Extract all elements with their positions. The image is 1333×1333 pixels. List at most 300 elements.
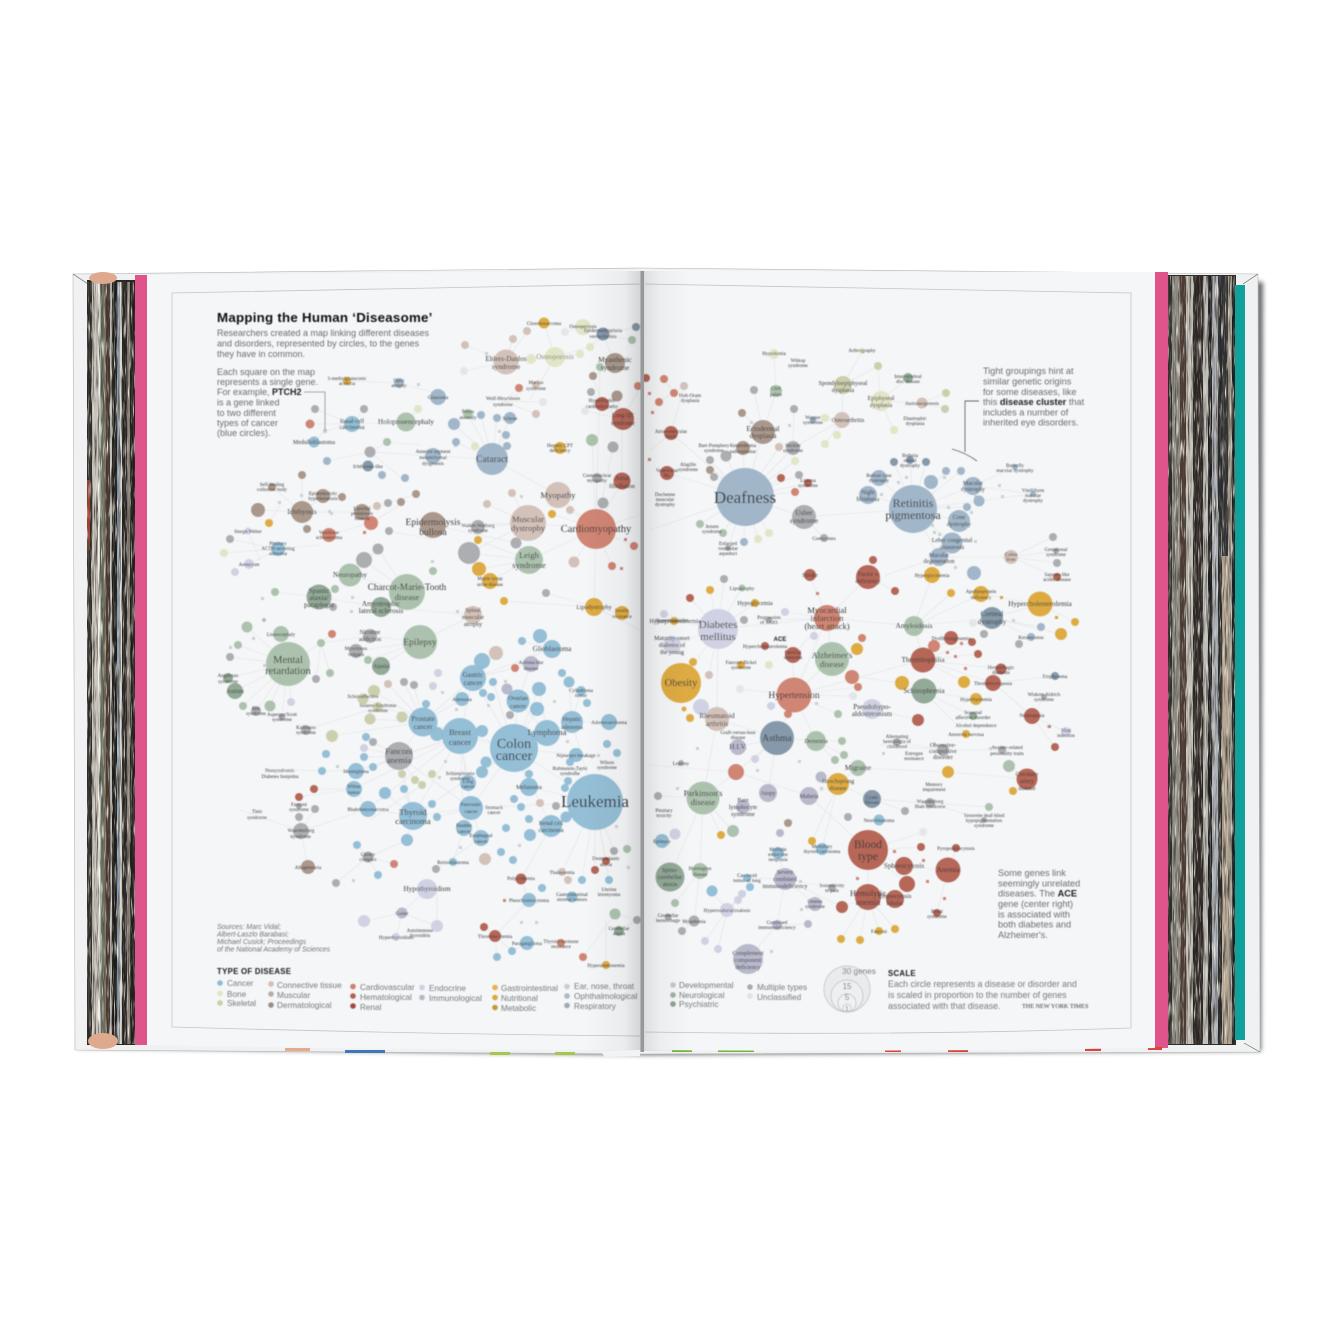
cardio-metabolic labels: disease [1018, 786, 1036, 792]
cancer cluster labels: Rhabdomyosarcoma [347, 808, 389, 813]
colon cancer node [490, 724, 538, 772]
cardio-metabolic labels: Alternating [886, 735, 909, 740]
cardio-metabolic labels: combined [773, 877, 797, 883]
cancer cluster labels: stromal tumors [557, 898, 587, 903]
cardio-metabolic labels: Hemorrhagic [988, 666, 1015, 671]
cardio-metabolic labels: affective disorder [955, 716, 991, 721]
cancer cluster labels: cancer [461, 785, 475, 790]
deafness cluster labels: Coenzymes [812, 537, 836, 542]
asthma node [760, 721, 794, 755]
legend: type of disease: Nutritional [501, 994, 538, 1003]
PTCH2 explanation text: to two different [217, 408, 276, 418]
cancer cluster labels: syndrome [291, 835, 312, 840]
cardio-metabolic labels: Thrombophilia [901, 656, 945, 664]
sources: Michael Cusick; Proceedings [217, 939, 307, 946]
heading cluster labels: Sturge-Weber [234, 530, 262, 535]
cancer cluster labels: Leukemia [561, 792, 629, 811]
heading cluster labels: Epidermolytic [309, 492, 338, 497]
heading cluster labels: hyperkeratosis [308, 497, 338, 502]
legend: type of disease: Psychiatric [679, 1000, 719, 1009]
heading cluster labels: Spastic [309, 587, 329, 595]
retinal cluster labels: blindness [857, 497, 880, 503]
cardio-metabolic labels: syndrome [974, 824, 995, 829]
legend: type of disease: Gastrointestinal [501, 984, 558, 993]
left pink edge [135, 275, 147, 1045]
cancer cluster labels: Solares-Syndrome [360, 704, 397, 709]
cardio-metabolic labels: Thrombocytopenia [974, 682, 1013, 687]
cancer cluster labels: ataxia [600, 863, 613, 868]
cancer cluster labels: Ovarian [508, 696, 528, 702]
retinal cluster labels: dystrophy [947, 522, 971, 528]
scale text: Each circle represents a disease or disorder and [888, 979, 1077, 989]
PTCH2 explanation text: (blue circles). [217, 428, 271, 438]
cardio-metabolic labels: Myocardial [807, 605, 847, 615]
bottom cover colour tabs [285, 1047, 1162, 1055]
cardio-metabolic labels: Huntington [689, 867, 712, 872]
cardio-metabolic labels: Hemolytic [850, 888, 886, 898]
heading cluster labels: bullosa [419, 528, 447, 538]
deafness node [716, 468, 774, 526]
blood type node [848, 830, 888, 870]
top centre cluster labels: Ehlers-Danlos [485, 355, 527, 363]
cardio-metabolic labels: disease [731, 736, 746, 741]
callout: disease cluster: similar genetic origins [983, 376, 1072, 386]
top centre cluster labels: Insulin [615, 609, 629, 614]
legend: type of disease: Connective tissue [277, 981, 342, 990]
cardio-metabolic labels: immunodeficiency [758, 926, 796, 931]
cardio-metabolic labels: disease [829, 786, 847, 792]
cancer cluster labels: leiomyoma [598, 893, 621, 898]
deafness cluster labels: Keratoderma [730, 444, 757, 449]
top centre cluster labels: syndrome [468, 529, 489, 534]
cancer cluster labels: Adrenocarcinoma [591, 721, 628, 726]
cardio-metabolic labels: of SARS [760, 621, 778, 626]
legend: type of disease: Multiple types [757, 983, 807, 992]
retinal cluster labels: Saposin-like [1044, 573, 1070, 578]
cancer cluster labels: Paraganglioma [512, 942, 543, 947]
retinal cluster labels: macular dystrophy [996, 469, 1034, 474]
top centre cluster labels: syndrome [512, 560, 546, 570]
cardio-metabolic labels: Estrogen [905, 752, 923, 757]
top centre cluster labels: Chondrosarcoma [527, 322, 562, 327]
heading cluster labels: ataxia/ [309, 594, 329, 602]
cardio-metabolic labels: H.I.V. [729, 743, 747, 751]
deafness cluster labels: Ectodermal [746, 425, 780, 433]
cardio-metabolic labels: Cerebellar [658, 914, 679, 919]
cardio-metabolic labels: Hypercholesterolemia [743, 645, 788, 650]
cancer cluster labels: Hyperammonemia [587, 964, 625, 969]
callout: ACE gene: gene (center right) [998, 899, 1073, 909]
cancer cluster labels: cancer [464, 679, 483, 687]
top centre cluster labels: syndrome [601, 364, 629, 372]
cardio-metabolic labels: Pyropoikilocytosis [937, 847, 975, 852]
neurological labels: Ataxia [373, 664, 389, 670]
legend: type of disease: Ear, nose, throat [574, 982, 635, 991]
cancer cluster labels: syndrome [450, 777, 471, 782]
cancer cluster labels: cancer [464, 810, 478, 815]
bottom spine flap [600, 1050, 640, 1057]
left page frame [172, 284, 640, 1036]
cardio-metabolic labels: Atopy [760, 791, 776, 797]
cardio-metabolic labels: Keratoconus [1018, 636, 1044, 641]
top centre cluster labels: anomaly [459, 416, 477, 421]
cardio-metabolic labels: Alcohol dependence [956, 724, 997, 729]
deafness cluster labels: Arthrography [848, 349, 876, 354]
neurological labels: syndrome [246, 712, 267, 717]
cancer cluster labels: Thyroid [399, 807, 427, 817]
cardio-metabolic labels: aldosteronism [852, 710, 893, 718]
cancer cluster labels: Meningioma [343, 770, 370, 775]
cancer cluster labels: Wilson [600, 761, 615, 766]
top centre cluster labels: Osteopetrosis [569, 325, 597, 330]
top centre cluster labels: Atrial [615, 476, 629, 482]
network: right page, deafness cluster [655, 348, 950, 557]
top centre cluster labels: Wolf-Hirschhorn [486, 397, 521, 402]
cancer cluster labels: Melanoma [516, 785, 542, 791]
cancer cluster labels: disease [524, 667, 539, 672]
callout: ACE gene: Alzheimer's. [998, 930, 1048, 940]
legend: type of disease: Metabolic [501, 1004, 536, 1013]
cardio-metabolic labels: diathesis [992, 671, 1010, 676]
deafness cluster labels: aqueduct [719, 552, 738, 557]
neurological labels: Asperger/Scott [267, 713, 298, 718]
legend: type of disease: Dermatological [277, 1001, 332, 1010]
deafness cluster labels: syndrome [702, 530, 723, 535]
deafness cluster labels: Atrioventricular [655, 430, 687, 435]
cardio-metabolic labels: neoplasia [769, 858, 788, 863]
PTCH2 explanation text: For example, PTCH2 [217, 387, 302, 397]
right page block [1168, 275, 1236, 1045]
top centre cluster labels: Centronuclear [583, 474, 611, 479]
cancer cluster labels: Thyroid hormone [543, 940, 579, 945]
top centre cluster labels: dysgenesis [422, 462, 444, 467]
top centre cluster labels: Glaucoma [428, 396, 449, 401]
cardio-metabolic labels: Parkinson's [684, 788, 722, 798]
cancer cluster labels: carcinoma [395, 816, 431, 826]
deafness cluster labels: dysplasia [870, 403, 892, 409]
PTCH2 explanation text: Each square on the map [217, 367, 315, 377]
retinal cluster labels: syndrome [1046, 553, 1067, 558]
neurological labels: syndrome [272, 718, 293, 723]
cancer cluster labels: cancer [510, 704, 526, 710]
neurological labels: Autism [226, 689, 244, 695]
cardio-metabolic labels: Severe [777, 870, 793, 876]
cancer cluster labels: Fanconi [385, 746, 413, 756]
deafness cluster labels: Lipoma [800, 479, 817, 484]
deafness cluster labels: Ventricular [656, 469, 678, 474]
deafness cluster labels: Hypodontia [762, 352, 787, 357]
retinal cluster labels: Leber congenital [932, 538, 973, 544]
cardio-metabolic labels: deficiency [971, 596, 992, 601]
cardio-metabolic labels: mellitus [700, 631, 736, 643]
cardio-metabolic labels: anemia [856, 897, 880, 907]
spine fold [640, 271, 644, 1052]
cardio-metabolic labels: Familial [785, 651, 802, 656]
cancer cluster labels: Tietz [252, 810, 263, 815]
cancer cluster labels: adenoma [561, 725, 583, 731]
cardio-metabolic labels: Hyperlipidemia [960, 698, 992, 703]
cardio-metabolic labels: Malaria [800, 794, 819, 800]
cardio-metabolic labels: Anemia [937, 866, 960, 874]
cardio-metabolic labels: Spherocytosis [884, 862, 924, 870]
cancer cluster labels: Schizophrenia [446, 772, 475, 777]
heading cluster labels: collodion body [257, 488, 288, 493]
legend: type of disease: Skeletal [227, 999, 256, 1008]
cancer cluster labels: Adenoma [452, 698, 472, 703]
network: left page, top centre clusters [416, 318, 650, 628]
cardio-metabolic labels: toxicity [656, 814, 672, 819]
cancer cluster labels: Desmoplastic [592, 857, 620, 862]
neurological labels: Myoclonus [345, 647, 367, 652]
heading cluster labels: Lipoidal [354, 507, 371, 512]
cardio-metabolic labels: Lipoatrophy [730, 587, 755, 592]
cancer cluster labels: Cerebellar [609, 927, 630, 932]
cancer cluster labels: Gastric [463, 671, 483, 679]
cardio-metabolic labels: Dysfibrinogenemia [932, 637, 971, 642]
cardio-metabolic labels: Apolipoprotein [966, 590, 997, 595]
retinal cluster labels: Gestational [1045, 548, 1068, 553]
scale circles: 5 [845, 993, 850, 1002]
heading cluster labels: Ichthyosis-like [353, 465, 384, 470]
cancer cluster labels: Pheochromocytoma [509, 899, 550, 904]
cancer cluster labels: syndrome [368, 709, 389, 714]
top centre cluster labels: Cardiomyopathy [561, 524, 632, 535]
PTCH2 explanation text: types of cancer [217, 418, 278, 428]
cancer cluster labels: cancer [487, 811, 501, 816]
scale heading: SCALE [888, 969, 916, 978]
cardio-metabolic labels: Hyperoxaluria/oxalosis [704, 909, 750, 914]
retinal cluster labels: Colon [1005, 553, 1018, 558]
cardio-metabolic labels: Dementia [804, 739, 828, 745]
cardio-metabolic labels: lymphocyte [729, 805, 758, 811]
sources: Sources: Marc Vidal; [217, 924, 281, 931]
deafness cluster labels: Diastrophic [903, 417, 927, 422]
neurological labels: Rett [252, 707, 261, 712]
top centre cluster labels: deficiency [550, 449, 571, 454]
cardio-metabolic labels: arthritis [706, 720, 728, 728]
epilepsy node [403, 625, 437, 659]
top centre cluster labels [416, 322, 635, 628]
cardio-metabolic labels: Maturity-onset [654, 636, 690, 642]
cardio-metabolic labels: Complement [732, 951, 764, 957]
cancer cluster labels: Pancreatic [461, 803, 482, 808]
cardio-metabolic labels: Shah syndrome [915, 805, 946, 810]
deafness cluster labels: syndrome [783, 449, 804, 454]
heading cluster labels: Holoprosencephaly [378, 418, 434, 426]
top centre cluster labels: verruciformis [589, 335, 617, 340]
legend: type of disease: Cardiovascular [360, 983, 415, 992]
cardio-metabolic labels: Cystic [866, 796, 879, 801]
cardio-metabolic labels: Omenn [808, 900, 823, 905]
cancer cluster labels: Schizoaffective [347, 695, 379, 700]
cancer cluster labels: Alkaptonuria [295, 866, 322, 871]
retinal cluster labels: liver [1006, 558, 1016, 563]
left page [147, 270, 640, 1050]
callout: ACE gene: seemingly unrelated [998, 878, 1080, 888]
cancer cluster labels: Thrombocytemia [478, 935, 513, 940]
neurological labels: Mental [273, 655, 303, 666]
legend heading: TYPE OF DISEASE [217, 967, 291, 976]
neurological labels: Epilepsy [403, 638, 437, 648]
callout: disease cluster: inherited eye disorders. [983, 418, 1078, 428]
cardio-metabolic labels: component [735, 958, 762, 964]
cardio-metabolic labels: Combined [767, 921, 788, 926]
legend: type of disease: Hematological [360, 993, 412, 1002]
retinal cluster labels: macular [1025, 494, 1041, 499]
cardio-metabolic labels: thyroid carcinoma [804, 850, 841, 855]
heading cluster labels: Optic [393, 379, 405, 384]
cardio-metabolic labels: endocrine [768, 853, 789, 858]
retinal cluster labels: Retinitis [893, 496, 934, 510]
cardio-metabolic labels: Wiskott-Aldrich [1028, 693, 1061, 698]
callout: ACE gene: both diabetes and [998, 920, 1071, 930]
top centre cluster labels: Marfan [529, 381, 544, 386]
cardio-metabolic labels: syndrome [927, 915, 948, 920]
top centre cluster labels: Muscular [512, 514, 544, 524]
cardio-metabolic labels: hemiplegia of [883, 740, 911, 745]
cancer cluster labels: Renal cell [539, 821, 563, 827]
cardio-metabolic labels: infection [1057, 734, 1075, 739]
cover corner folds [73, 274, 1260, 1052]
cancer cluster labels: tumor [348, 791, 360, 796]
legend: type of disease: Developmental [679, 981, 734, 990]
cardio-metabolic labels: Hyperproinsulinemia [650, 619, 701, 625]
top centre cluster labels: Anterior segment [416, 450, 451, 455]
neurological labels: Nicotine [360, 630, 381, 636]
PTCH2 explanation text: represents a single gene. [217, 377, 318, 387]
callout: ACE gene: is associated with [998, 910, 1070, 920]
top centre cluster labels: Myasthenic [598, 356, 632, 364]
cardio-metabolic labels: Blood [854, 839, 882, 851]
heading cluster labels: Amyotrophic [362, 600, 400, 608]
cardio-metabolic labels: Alzheimer's [812, 650, 852, 660]
retinal cluster labels [857, 454, 1072, 583]
heading cluster labels [234, 377, 461, 615]
deafness cluster labels: Witkop [791, 359, 806, 364]
cardio-metabolic labels: impairment [922, 788, 946, 793]
cancer cluster labels: Asthma-like [519, 661, 544, 666]
deafness cluster labels: fib. [664, 474, 670, 479]
spine shadow, left page [585, 271, 641, 1051]
retinal cluster labels: Bothnia [902, 454, 919, 459]
hypertension node [776, 678, 812, 712]
intro text block: and disorders, represented by circles, to the genes [217, 338, 420, 348]
legend: type of disease: Cancer [227, 979, 254, 988]
cardio-metabolic labels: Pituitary [655, 809, 673, 814]
cardio-metabolic labels: Anorexia nervosa [948, 733, 984, 738]
cancer cluster labels: Diabetes Insipidus [261, 775, 299, 780]
heading cluster labels: Basal-cell [340, 419, 364, 425]
legend: type of disease: Bone [227, 990, 247, 999]
cancer cluster labels: Retinoblastoma [437, 861, 469, 866]
top centre cluster labels: resistance [612, 615, 633, 620]
retinal cluster labels: Night [861, 490, 875, 496]
cardio-metabolic labels: Amyloidosis [896, 622, 933, 630]
retinal cluster labels: amaurosis [940, 545, 965, 551]
cancer cluster labels: ataxia [613, 932, 626, 937]
callout: disease cluster: includes a number of [983, 408, 1069, 418]
cancer cluster labels: syndrome [597, 766, 618, 771]
cancer cluster labels: syndrome [289, 808, 310, 813]
legend: type of disease: Respiratory [574, 1002, 617, 1011]
cardio-metabolic labels: Diabetes [699, 619, 737, 631]
deafness cluster labels: palate [770, 393, 783, 398]
top centre cluster labels: Hypertrophic [589, 399, 616, 404]
retinal cluster labels: dystrophy [900, 464, 920, 469]
deafness cluster labels: Cleft [771, 387, 782, 392]
cardio-metabolic labels: Obsessive- [930, 743, 956, 749]
cardio-metabolic labels: the young [660, 650, 684, 656]
cardio-metabolic labels [650, 572, 1075, 971]
top centre cluster labels: mesenchymal [419, 456, 447, 461]
cardio-metabolic labels: Hypertension [768, 691, 820, 701]
cancer cluster labels: cancer [474, 840, 488, 845]
cardio-metabolic labels: Multiple [769, 848, 787, 853]
cardio-metabolic labels: Progression [757, 616, 781, 621]
right pink edge [1155, 272, 1168, 1048]
cardio-metabolic labels: immunodeficiency [762, 883, 808, 890]
book cover [73, 268, 1260, 1054]
cancer cluster labels: Esophageal [469, 834, 493, 839]
legend: type of disease: Neurological [679, 991, 725, 1000]
deafness cluster labels: Holt-Oram [679, 394, 701, 399]
retinal cluster labels: dystrophy [869, 479, 890, 484]
top centre cluster labels: dystrophy [511, 523, 546, 533]
network: cancer cluster [247, 629, 641, 969]
disease cluster leader line [952, 401, 979, 461]
top centre cluster labels: Sclerae [503, 417, 518, 422]
cardio-metabolic labels: syndrome [1034, 698, 1055, 703]
cancer cluster labels: Prostate [411, 715, 435, 723]
top centre cluster labels: syndrome [492, 363, 520, 371]
callout: ACE gene: Some genes link [998, 868, 1066, 878]
network links [224, 323, 1075, 965]
cancer cluster labels: syndrome [247, 816, 268, 821]
neurological labels: vulgaris [348, 653, 364, 658]
network: left page, neurological cluster [218, 618, 437, 736]
top centre cluster labels: muscular [462, 615, 484, 621]
cardio-metabolic labels: infarction [810, 613, 844, 623]
cancer cluster labels: Gastrointestinal [556, 893, 588, 898]
cardio-metabolic labels: Obesity [665, 678, 698, 689]
PTCH2 leader line [304, 392, 325, 431]
cardio-metabolic labels: Coronary [1016, 772, 1038, 778]
neurological labels: syndrome [296, 731, 317, 736]
cancer cluster labels: anemia [387, 755, 411, 765]
scale circles: 15 [842, 982, 852, 991]
deafness cluster labels: dysplasia [832, 388, 854, 394]
cancer cluster labels: Hypothyroidism [403, 885, 451, 893]
deafness cluster labels: Duchenne [655, 493, 676, 498]
retinal cluster labels: dystrophy [961, 487, 985, 493]
heading cluster labels: schwannoma [316, 536, 343, 541]
heading cluster labels: atrophy [391, 384, 407, 389]
cardio-metabolic labels: deficiency [736, 964, 760, 971]
deafness cluster labels: palmoplantar [730, 450, 757, 455]
cancer cluster labels: cancer [449, 737, 471, 747]
deafness cluster labels: Alagille [680, 463, 697, 468]
cardio-metabolic labels: syndrome [731, 812, 755, 818]
cardio-metabolic labels: Renal [931, 910, 943, 915]
deafness cluster labels: block [665, 435, 677, 440]
cancer cluster labels: Lung [463, 780, 474, 785]
deafness cluster labels: vestibular [718, 547, 738, 552]
callout: disease cluster: this disease cluster that [983, 397, 1084, 407]
intro text block: Researchers created a map linking different diseases [217, 328, 429, 338]
top centre cluster labels: Epidermodysplasia [584, 329, 623, 334]
cardio-metabolic labels: Seasonal [964, 711, 982, 716]
legend: type of disease: Muscular [277, 991, 310, 1000]
